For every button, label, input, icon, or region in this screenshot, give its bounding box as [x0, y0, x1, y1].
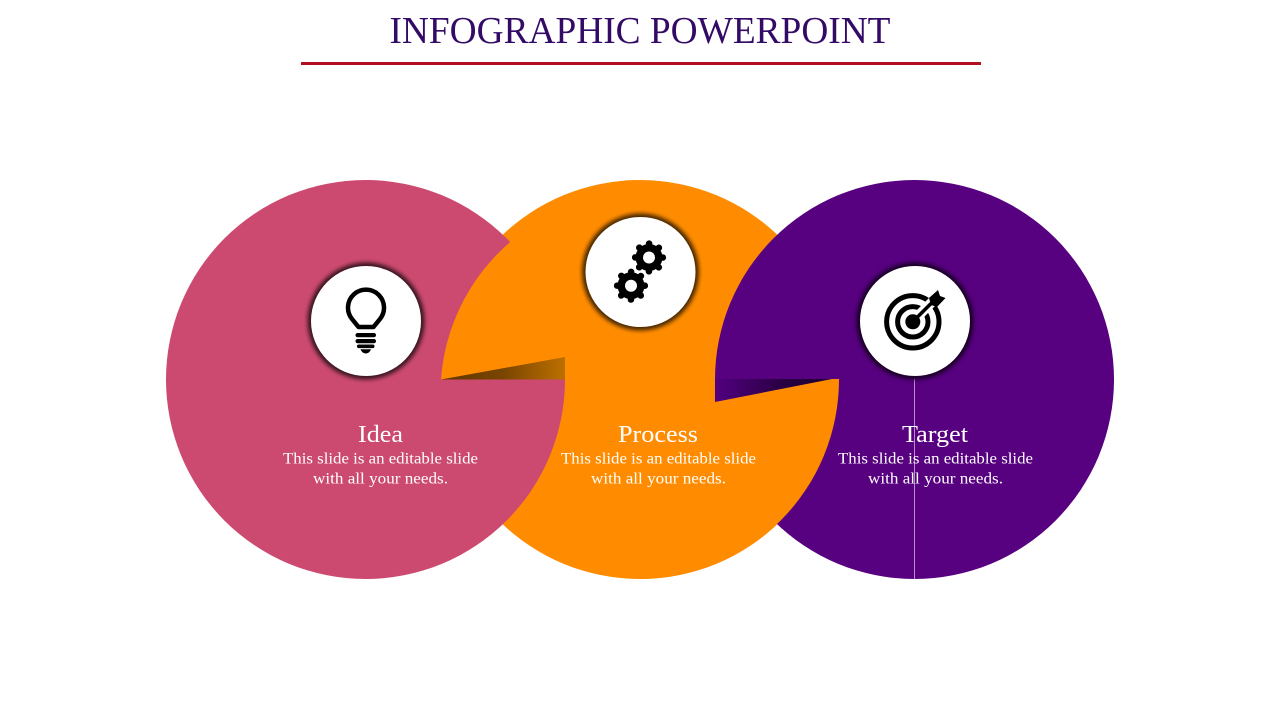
target vertical line [914, 379, 915, 579]
orange circle base [440, 180, 840, 579]
text block: target: with all your needs. [868, 470, 1003, 488]
panel: target circle [715, 180, 1114, 579]
icon: light bulb [348, 290, 384, 354]
text block: process: This slide is an editable slide [561, 450, 756, 468]
icon: target with arrow [887, 286, 948, 348]
icon badge: process [582, 214, 699, 330]
panel: idea circle [166, 180, 565, 579]
text block: idea [283, 422, 478, 488]
text block: target: This slide is an editable slide [838, 450, 1033, 468]
wedge shadow: target [715, 379, 835, 402]
icon badge: target [856, 262, 974, 380]
icon: gears [617, 244, 663, 300]
text block: process: with all your needs. [591, 470, 726, 488]
wedge shadow: idea [441, 357, 565, 380]
text block: target: Target [902, 422, 968, 448]
title underline [301, 62, 981, 65]
panel: process circle upper half [441, 194, 839, 420]
text block: idea: Idea [358, 422, 403, 448]
text block: idea: This slide is an editable slide [283, 450, 478, 468]
title: INFOGRAPHIC POWERPOINT [390, 10, 890, 52]
text block: process: Process [618, 422, 698, 448]
text block: process [561, 422, 756, 488]
icon badge: idea [308, 262, 424, 380]
panel: process circle lower right [640, 379, 839, 579]
text block: target [838, 422, 1033, 488]
text block: idea: with all your needs. [313, 470, 448, 488]
